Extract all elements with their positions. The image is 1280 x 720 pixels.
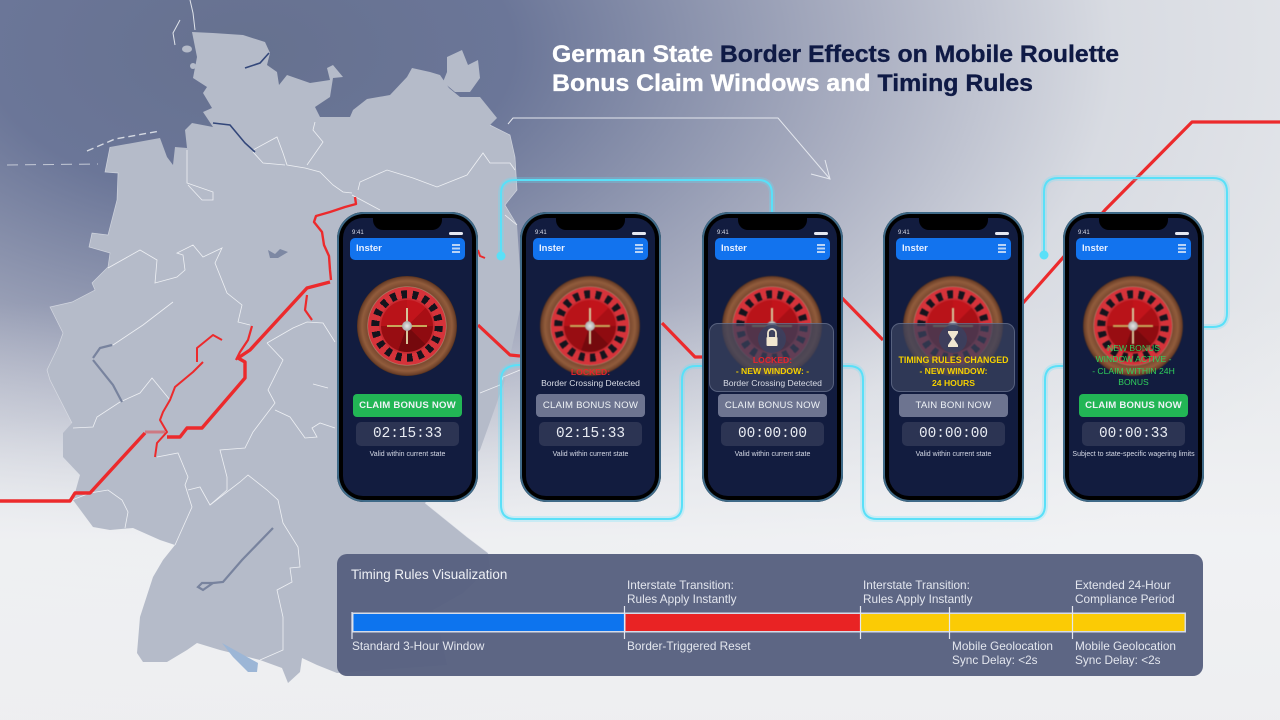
- border message: Border Crossing Detected: [541, 378, 640, 388]
- border message: Border Crossing Detected: [723, 378, 822, 388]
- label: standard window: Standard 3-Hour Window: [352, 639, 485, 653]
- label: extended period: [1075, 578, 1175, 606]
- countdown timer: 02:15:33: [556, 426, 625, 442]
- island: Ruegen: [443, 50, 480, 92]
- disabled claim button: CLAIM BONUS NOW: [725, 400, 820, 411]
- disabled claim button: [718, 394, 827, 417]
- disabled claim button: TAIN BONI NOW: [916, 400, 991, 411]
- label: geolocation delay two: Sync Delay: <2s: [1075, 653, 1161, 667]
- countdown timer: 00:00:00: [919, 426, 988, 442]
- app bar: [896, 238, 1011, 260]
- label: extended period: Extended 24-Hour: [1075, 578, 1171, 592]
- countdown timer: [902, 422, 1005, 446]
- lock overlay: [709, 323, 834, 392]
- caption: Valid within current state: [553, 451, 628, 458]
- connector node left: [496, 252, 506, 260]
- label: interstate transition one: Interstate Transition:: [627, 578, 734, 592]
- connector glow: [501, 178, 1227, 519]
- countdown timer: 00:00:00: [738, 426, 807, 442]
- connector node right: [1040, 250, 1048, 260]
- islands: North Frisian: [7, 0, 213, 165]
- timeline ticks: [352, 606, 1072, 639]
- app bar: [1076, 238, 1191, 260]
- title: [552, 41, 1119, 97]
- timeline labels: [352, 578, 1176, 667]
- new window message: - NEW WINDOW: -: [736, 366, 809, 376]
- app bar: [715, 238, 830, 260]
- locked message: LOCKED:: [753, 355, 792, 365]
- new window active message: - CLAIM WITHIN 24H: [1092, 366, 1175, 376]
- claim button: [1079, 394, 1188, 417]
- coast highlights: [47, 125, 517, 567]
- segment: standard window: [354, 614, 624, 631]
- countdown timer: 00:00:33: [1099, 426, 1168, 442]
- phone 1: active bonus: [337, 212, 478, 502]
- roulette wheel: [1083, 276, 1183, 376]
- app bar: Inster: [356, 243, 382, 254]
- label: interstate transition two: Rules Apply Instantly: [863, 592, 973, 606]
- countdown timer: [356, 422, 459, 446]
- new window message: - NEW WINDOW:: [919, 366, 988, 376]
- label: geolocation delay two: Mobile Geolocation: [1075, 639, 1176, 653]
- app bar: Inster: [1082, 243, 1108, 254]
- thin white arrow: [508, 118, 830, 179]
- state borders: [72, 122, 520, 660]
- phone 2: border crossing detected: 9:41: [535, 230, 547, 236]
- claim button: CLAIM BONUS NOW: [359, 400, 456, 411]
- phone 4: timing rules changed: [883, 212, 1024, 502]
- new window active message: NEW BONUS: [1107, 343, 1160, 353]
- icon: hourglass: [939, 325, 967, 353]
- caption: Valid within current state: [370, 451, 445, 458]
- segment: extended window: [861, 614, 1184, 631]
- timing changed message: TIMING RULES CHANGED: [899, 355, 1008, 365]
- countdown timer: [539, 422, 642, 446]
- caption: Subject to state-specific wagering limits: [1072, 451, 1195, 458]
- new window active message: [1092, 343, 1175, 387]
- disabled claim button: [899, 394, 1008, 417]
- caption: Valid within current state: [735, 451, 810, 458]
- label: geolocation delay one: [952, 639, 1053, 667]
- connector lines: [501, 178, 1227, 519]
- title line two: Bonus Claim Windows and Timing Rules: [552, 70, 1033, 97]
- label: interstate transition one: [627, 578, 737, 606]
- phone 4: timing rules changed: 9:41: [898, 230, 910, 236]
- app bar: Inster: [902, 243, 928, 254]
- timing overlay: [891, 323, 1015, 392]
- red border-crossing line: west: [0, 197, 356, 501]
- countdown timer: [721, 422, 824, 446]
- disabled claim button: [536, 394, 645, 417]
- label: interstate transition two: [863, 578, 973, 606]
- disabled claim button: CLAIM BONUS NOW: [543, 400, 638, 411]
- phone 2: border crossing detected: [520, 212, 661, 502]
- roulette wheel: [722, 276, 822, 376]
- label: interstate transition one: Rules Apply Instantly: [627, 592, 737, 606]
- phone 5: new window active: 9:41: [1078, 230, 1090, 236]
- red border-crossing line: across phones: [478, 122, 1280, 357]
- label: extended period: Compliance Period: [1075, 592, 1175, 606]
- cyan connectors: [496, 178, 1227, 519]
- map of Germany: [7, 0, 522, 683]
- label: geolocation delay two: [1075, 639, 1176, 667]
- roulette wheel: [357, 276, 457, 376]
- countdown timer: 02:15:33: [373, 426, 442, 442]
- new window active message: WINDOW ACTIVE -: [1096, 354, 1171, 364]
- caption: Valid within current state: [916, 451, 991, 458]
- app bar: [350, 238, 465, 260]
- duration message: 24 HOURS: [932, 378, 975, 388]
- label: geolocation delay one: Mobile Geolocation: [952, 639, 1053, 653]
- app bar: [533, 238, 648, 260]
- app bar: Inster: [539, 243, 565, 254]
- roulette wheel: [540, 276, 640, 376]
- panel heading: Timing Rules Visualization: [351, 567, 507, 582]
- phone 1: active bonus: 9:41: [352, 230, 364, 236]
- label: geolocation delay one: Sync Delay: <2s: [952, 653, 1038, 667]
- roulette wheel: [903, 276, 1003, 376]
- phone 3: locked with new window: [702, 212, 843, 502]
- phone 5: new window active: [1063, 212, 1204, 502]
- title line one: German State Border Effects on Mobile Roulette: [552, 41, 1119, 68]
- locked message: LOCKED:: [571, 367, 610, 377]
- claim button: [353, 394, 462, 417]
- rivers and lakes: [93, 53, 288, 672]
- label: border reset: Border-Triggered Reset: [627, 639, 751, 653]
- segment: border reset: [626, 614, 860, 631]
- timeline bar: [352, 606, 1186, 639]
- phone 3: locked with new window: 9:41: [717, 230, 729, 236]
- new window active message: BONUS: [1118, 377, 1149, 387]
- countdown timer: [1082, 422, 1185, 446]
- icon: padlock: [758, 325, 786, 353]
- label: interstate transition two: Interstate Transition:: [863, 578, 970, 592]
- app bar: Inster: [721, 243, 747, 254]
- claim button: CLAIM BONUS NOW: [1085, 400, 1182, 411]
- panel: timing rules visualization: [337, 554, 1203, 676]
